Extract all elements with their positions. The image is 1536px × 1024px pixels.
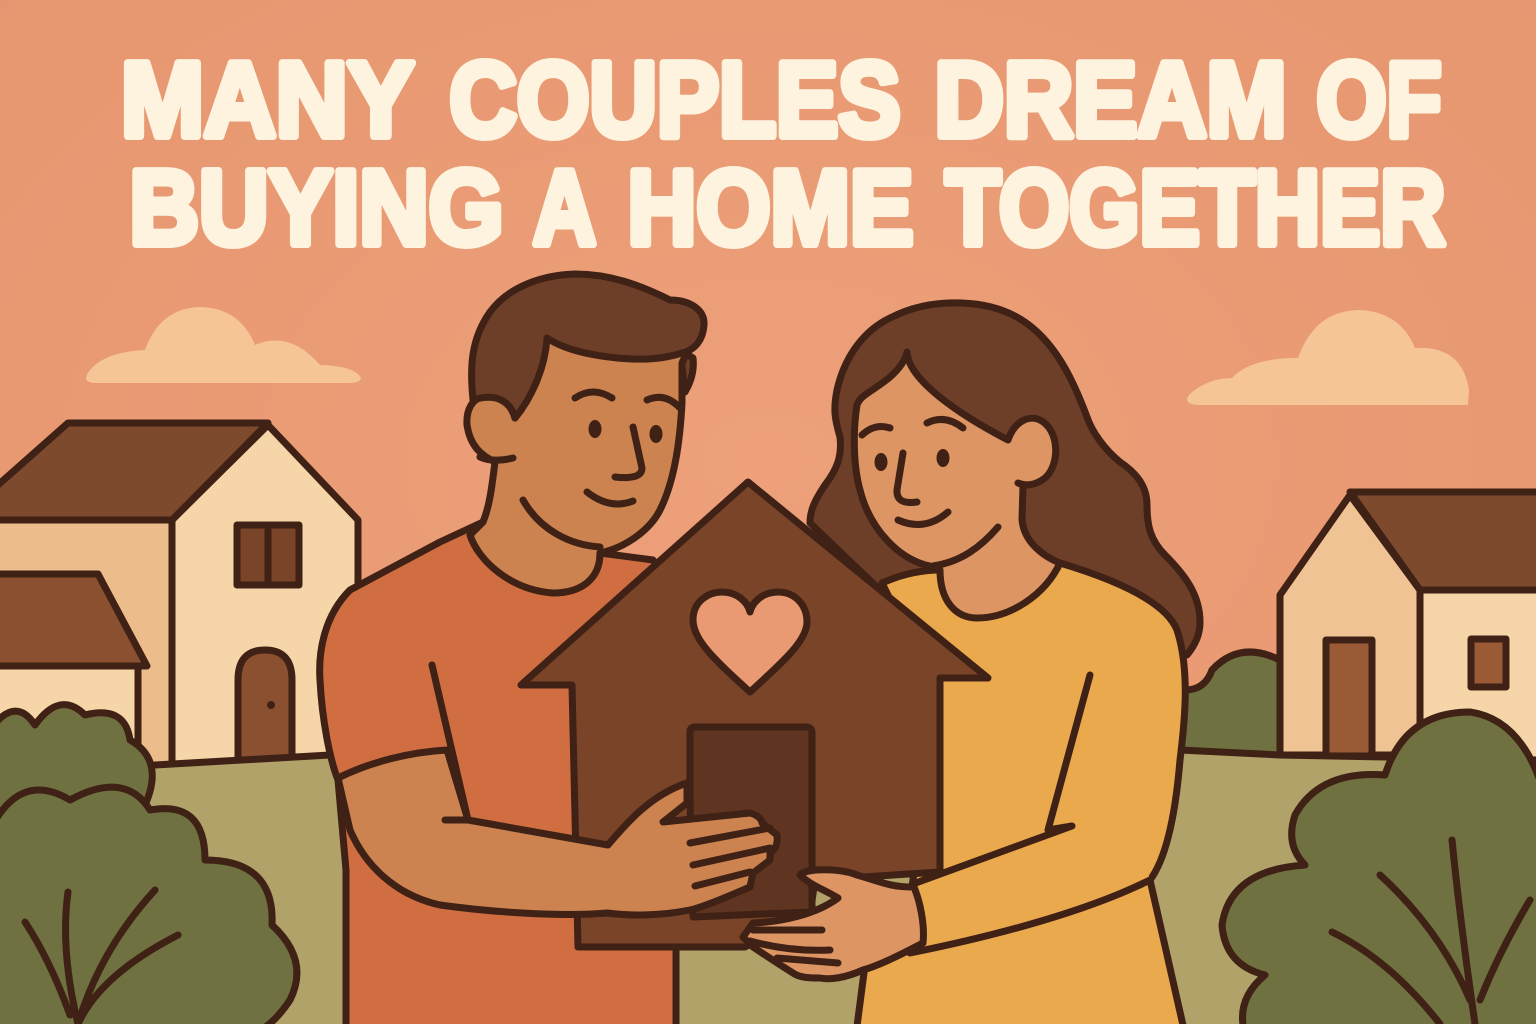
title: DREAM [934, 41, 1286, 159]
woman arm line [1048, 675, 1090, 830]
heart [693, 592, 807, 692]
title: BUYING [130, 149, 504, 267]
man hair [472, 274, 704, 418]
man arm and hand [338, 665, 777, 915]
roof [0, 423, 268, 520]
house right [1280, 492, 1536, 760]
bush left back [0, 705, 152, 840]
window [1471, 639, 1506, 687]
cloud right [1187, 310, 1469, 405]
cloud left [86, 307, 361, 383]
woman features [862, 419, 998, 566]
window [237, 525, 299, 585]
man [320, 274, 704, 1024]
house body [521, 482, 988, 947]
ground [0, 750, 1536, 1024]
man side hair [680, 350, 693, 392]
man body [320, 522, 676, 1024]
house wall [0, 520, 172, 770]
front gable [172, 425, 358, 770]
woman body [856, 563, 1185, 1024]
woman hand [743, 870, 923, 979]
title: TOGETHER [946, 149, 1446, 267]
hedge behind right [1180, 652, 1280, 760]
title: OF [1316, 41, 1442, 159]
man face and neck [467, 338, 688, 593]
title: COUPLES [450, 41, 900, 159]
woman forearm [910, 700, 1150, 953]
title: MANY [121, 41, 414, 159]
model house [521, 482, 988, 947]
door [690, 727, 812, 917]
door [1326, 640, 1372, 756]
door [238, 650, 292, 760]
woman hair [810, 303, 1200, 655]
woman face and neck [854, 352, 1060, 618]
house left front [0, 574, 147, 750]
bush left [0, 787, 297, 1024]
house left back [0, 423, 358, 770]
woman [854, 352, 1185, 1024]
title [121, 41, 1446, 267]
title: HOME [628, 149, 914, 267]
bush right [1222, 712, 1536, 1024]
title: A [533, 149, 596, 267]
man features [480, 392, 680, 547]
